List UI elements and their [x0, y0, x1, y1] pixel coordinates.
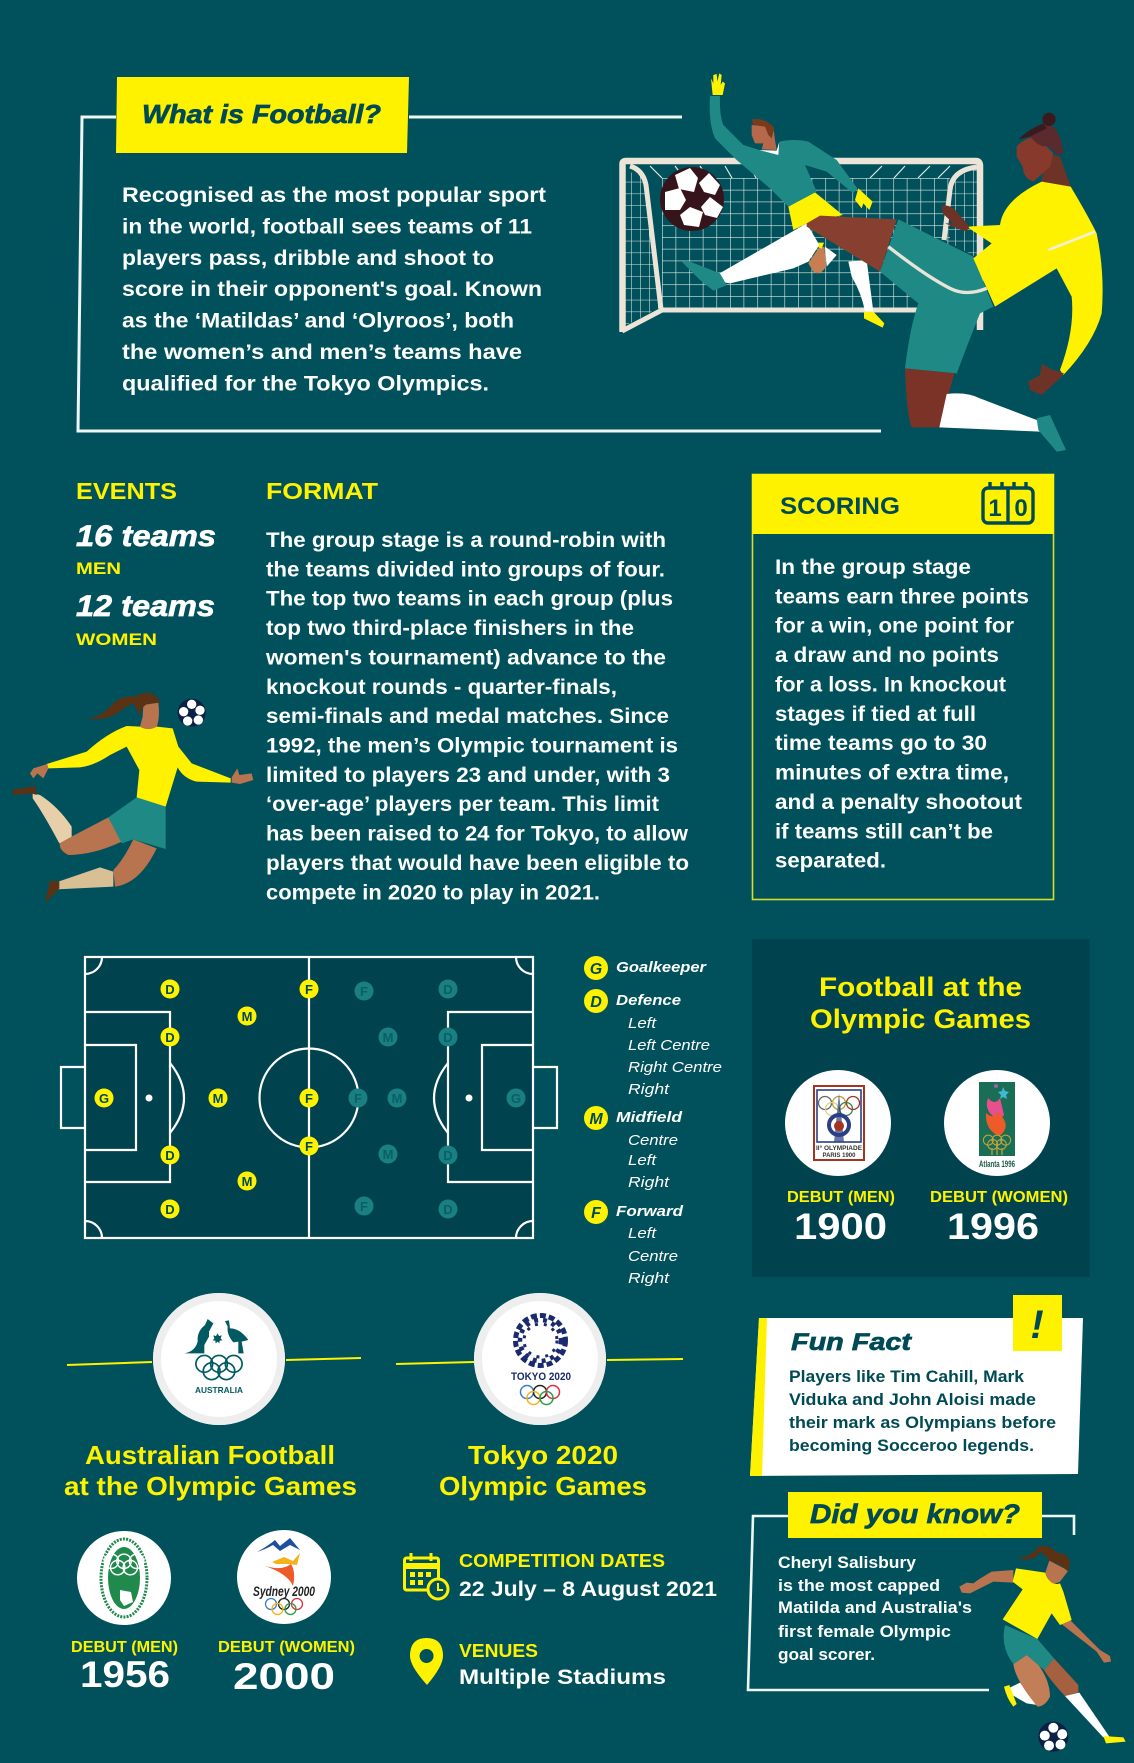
- illustration: female player heading ball: [13, 693, 253, 903]
- legend: positions: Left Centre: [628, 1037, 710, 1054]
- team positions: teal: F: [354, 1091, 362, 1106]
- football pitch diagram: [61, 957, 557, 1238]
- panel: fun fact: Viduka and John Aloisi made: [789, 1390, 1036, 1409]
- goalkeeper: [682, 73, 897, 328]
- format text: the teams divided into groups of four.: [266, 557, 665, 581]
- panel: australian football at the olympic games: DEBUT (MEN): [71, 1639, 178, 1656]
- scoring text: if teams still can’t be: [775, 819, 993, 843]
- legend: positions: [584, 956, 722, 1287]
- events: WOMEN: [76, 630, 157, 649]
- team positions: teal: D: [443, 1148, 453, 1163]
- did you know text: goal scorer.: [778, 1645, 875, 1664]
- intro text: in the world, football sees teams of 11: [122, 214, 532, 238]
- logo: atlanta 1996: [944, 1070, 1050, 1176]
- icon: calendar: [404, 1553, 448, 1599]
- format text: top two third-place finishers in the: [266, 616, 634, 640]
- panel: australian football at the olympic games: Australian Football: [85, 1440, 335, 1470]
- pitch lines: [61, 957, 557, 1238]
- format text: players that would have been eligible to: [266, 851, 689, 875]
- format text: The group stage is a round-robin with: [266, 528, 666, 552]
- legend: positions: Centre: [628, 1132, 678, 1149]
- venues: VENUES: [459, 1641, 538, 1661]
- football: [660, 167, 724, 231]
- legend: positions: D: [590, 994, 602, 1011]
- format text: limited to players 23 and under, with 3: [266, 763, 670, 787]
- team positions: teal: M: [383, 1147, 393, 1162]
- panel: scoring: SCORING: [780, 493, 900, 520]
- scoring text: a draw and no points: [775, 643, 999, 667]
- did you know text: Cheryl Salisbury: [778, 1553, 917, 1572]
- panel: fun fact: [750, 1295, 1083, 1476]
- icon: scoreboard: [983, 482, 1033, 523]
- scoring text: minutes of extra time,: [775, 761, 1009, 785]
- panel: what is football: [78, 77, 881, 431]
- events: MEN: [76, 559, 121, 578]
- legend: positions: Forward: [616, 1203, 684, 1220]
- panel: football at the olympic games: DEBUT (WOMEN): [930, 1189, 1068, 1206]
- panel: australian football at the olympic games: [64, 1293, 361, 1697]
- panel: football at the olympic games: 1900: [794, 1206, 887, 1247]
- scoring text: In the group stage: [775, 555, 971, 579]
- team positions: teal: [348, 980, 526, 1218]
- format text: semi-finals and medal matches. Since: [266, 704, 669, 728]
- scoring text: teams earn three points: [775, 584, 1029, 608]
- format text: compete in 2020 to play in 2021.: [266, 880, 600, 904]
- team positions: yellow: F: [305, 1091, 313, 1106]
- legend: positions: Midfield: [616, 1109, 683, 1126]
- logo: tokyo 2020: TOKYO 2020: [511, 1371, 571, 1383]
- panel: fun fact: Fun Fact: [791, 1329, 912, 1356]
- illustration: goal and players: [622, 73, 1103, 452]
- icon: location pin: [410, 1638, 443, 1685]
- panel: football at the olympic games: DEBUT (MEN): [787, 1189, 895, 1206]
- team positions: yellow: D: [165, 982, 175, 997]
- legend: positions: Left: [628, 1015, 657, 1032]
- team positions: yellow: F: [305, 1139, 313, 1154]
- panel: australian football at the olympic games: 2000: [233, 1656, 335, 1697]
- legend: positions: Right Centre: [628, 1059, 722, 1076]
- events: EVENTS: [76, 478, 177, 504]
- logo: atlanta 1996: Atlanta 1996: [979, 1159, 1015, 1170]
- competition dates: 22 July – 8 August 2021: [459, 1578, 717, 1601]
- team positions: teal: D: [443, 982, 453, 997]
- events: 16 teams: [76, 520, 216, 553]
- team positions: teal: D: [443, 1202, 453, 1217]
- panel: tokyo 2020: [396, 1293, 717, 1689]
- logo: sydney 2000: [237, 1530, 331, 1624]
- format text: has been raised to 24 for Tokyo, to allow: [266, 822, 688, 846]
- main player: [880, 113, 1103, 452]
- intro text: Recognised as the most popular sport: [122, 183, 546, 207]
- venues: Multiple Stadiums: [459, 1666, 666, 1689]
- panel: australian football at the olympic games: 1956: [80, 1654, 170, 1695]
- logo: tokyo 2020: [474, 1293, 606, 1425]
- format: [265, 478, 689, 904]
- legend: positions: M: [589, 1111, 603, 1128]
- logo: sydney 2000: Sydney 2000: [253, 1583, 315, 1599]
- panel: scoring: [752, 474, 1054, 900]
- legend: positions: Right: [628, 1270, 670, 1287]
- logo: paris 1900: [785, 1070, 891, 1176]
- logo: paris 1900: PARIS 1900: [823, 1153, 856, 1159]
- format text: [265, 528, 689, 904]
- panel: football at the olympic games: 1996: [947, 1206, 1039, 1247]
- legend: positions: Right: [628, 1174, 670, 1191]
- legend: positions: F: [591, 1205, 602, 1222]
- logo: paris 1900: II° OLYMPIADE: [816, 1144, 863, 1152]
- legend: positions: Left: [628, 1152, 657, 1169]
- team positions: yellow: M: [242, 1174, 252, 1189]
- legend: positions: Goalkeeper: [616, 959, 707, 976]
- did you know text: Matilda and Australia's: [778, 1598, 972, 1617]
- panel: fun fact: Players like Tim Cahill, Mark: [789, 1367, 1025, 1386]
- icon: exclamation: [1013, 1295, 1062, 1351]
- format text: The top two teams in each group (plus: [266, 587, 673, 611]
- scoring text: for a loss. In knockout: [775, 672, 1006, 696]
- team positions: yellow: M: [242, 1009, 252, 1024]
- team positions: yellow: D: [165, 1030, 175, 1045]
- team positions: yellow: M: [213, 1091, 223, 1106]
- illustration: running player: [959, 1546, 1126, 1752]
- legend: positions: Left: [628, 1225, 657, 1242]
- legend: positions: G: [590, 961, 602, 978]
- events: [76, 478, 216, 649]
- scoring text: separated.: [775, 849, 886, 873]
- heading box: [116, 77, 409, 153]
- did you know text: [778, 1553, 972, 1664]
- icon: scoreboard: 0: [1014, 495, 1028, 522]
- icon: exclamation: !: [1030, 1303, 1044, 1347]
- competition dates: [459, 1551, 717, 1601]
- team positions: yellow: F: [305, 982, 313, 997]
- team positions: yellow: D: [165, 1202, 175, 1217]
- did you know text: is the most capped: [778, 1576, 940, 1595]
- scoring text: and a penalty shootout: [775, 790, 1022, 814]
- icon: scoreboard: 1: [988, 495, 1002, 522]
- panel: did you know: Did you know?: [810, 1499, 1020, 1529]
- logo: melbourne 1956: [77, 1531, 171, 1625]
- panel: football at the olympic games: Football at the: [819, 972, 1022, 1002]
- panel: fun fact: their mark as Olympians before: [789, 1413, 1056, 1432]
- team positions: teal: G: [511, 1091, 521, 1106]
- intro text: players pass, dribble and shoot to: [122, 246, 494, 270]
- scoring text: for a win, one point for: [775, 614, 1015, 638]
- team positions: teal: F: [360, 1199, 368, 1214]
- did you know text: first female Olympic: [778, 1622, 951, 1641]
- format text: women's tournament) advance to the: [265, 645, 666, 669]
- team positions: yellow: G: [99, 1091, 109, 1106]
- team positions: teal: D: [443, 1030, 453, 1045]
- panel: tokyo 2020: Olympic Games: [439, 1471, 647, 1501]
- format text: ‘over-age’ players per team. This limit: [266, 792, 659, 816]
- intro text: qualified for the Tokyo Olympics.: [122, 371, 489, 395]
- panel: fun fact: becoming Socceroo legends.: [789, 1436, 1034, 1455]
- panel: football at the olympic games: [752, 939, 1090, 1277]
- format text: 1992, the men’s Olympic tournament is: [266, 734, 678, 758]
- panel: australian football at the olympic games: at the Olympic Games: [64, 1471, 357, 1501]
- scoring text: [775, 555, 1029, 873]
- legend: positions: Right: [628, 1081, 670, 1098]
- legend: positions: Centre: [628, 1248, 678, 1265]
- intro text: [122, 183, 546, 395]
- format text: knockout rounds - quarter-finals,: [266, 675, 617, 699]
- scoring text: stages if tied at full: [775, 702, 976, 726]
- competition dates: COMPETITION DATES: [459, 1551, 665, 1571]
- scoring text: time teams go to 30: [775, 731, 987, 755]
- intro text: as the ‘Matildas’ and ‘Olyroos’, both: [122, 309, 514, 333]
- logo: australia olympic: [153, 1293, 285, 1425]
- team positions: yellow: D: [165, 1148, 175, 1163]
- panel: tokyo 2020: Tokyo 2020: [468, 1440, 618, 1470]
- logo: australia olympic: AUSTRALIA: [195, 1385, 243, 1395]
- goal net: [622, 161, 980, 332]
- team positions: teal: M: [392, 1091, 402, 1106]
- legend: positions: Defence: [616, 992, 681, 1009]
- intro text: the women’s and men’s teams have: [122, 340, 522, 364]
- format: FORMAT: [266, 478, 378, 504]
- team positions: teal: M: [383, 1030, 393, 1045]
- panel: australian football at the olympic games: DEBUT (WOMEN): [218, 1639, 355, 1656]
- venues: [459, 1641, 666, 1689]
- panel: football at the olympic games: Olympic Games: [810, 1004, 1031, 1034]
- team positions: teal: F: [360, 984, 368, 999]
- heading box: What is Football?: [142, 99, 381, 129]
- team positions: yellow: [94, 980, 318, 1218]
- events: 12 teams: [76, 590, 215, 623]
- panel: did you know: [748, 1492, 1126, 1752]
- intro text: score in their opponent's goal. Known: [122, 277, 542, 301]
